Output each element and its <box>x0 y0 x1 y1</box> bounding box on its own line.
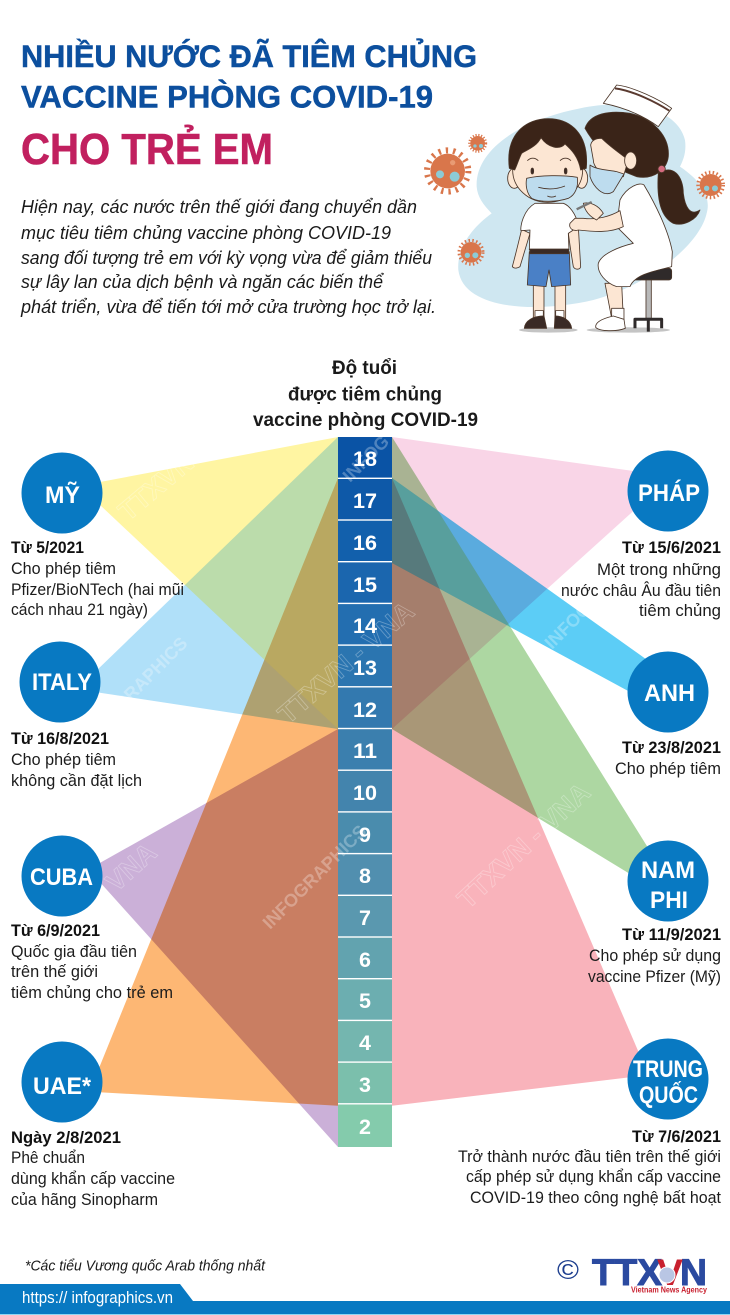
badge: Mỹ: MỸ <box>45 481 80 509</box>
badge: Nam Phi: NAM <box>641 857 695 884</box>
badge: Italy <box>20 642 100 722</box>
watermarks: INFOGRAPHICS <box>259 821 370 933</box>
caption: Italy: không cần đặt lịch <box>11 772 142 790</box>
nurse <box>570 85 700 332</box>
heading: age axis: được tiêm chủng <box>288 384 442 406</box>
cell: age 9 <box>338 813 392 853</box>
caption: Nam Phi: Cho phép sử dụng <box>589 947 721 965</box>
logo: TTXVN: V <box>657 1252 683 1293</box>
caption: Italy: Từ 16/8/2021 <box>11 730 109 748</box>
badge: Pháp <box>628 450 708 532</box>
caption: Anh: Cho phép tiêm <box>615 760 721 778</box>
cell: age 18 <box>338 437 392 478</box>
wedge: Trung Quốc ages 3 to 17 <box>392 478 642 1106</box>
cell: age 11 <box>338 729 392 770</box>
icon: virus large <box>427 150 468 192</box>
caption: Nam Phi <box>588 926 721 986</box>
caption: Pháp: Một trong những <box>597 561 721 579</box>
age scale bar <box>338 437 392 1147</box>
caption: UAE <box>11 1129 175 1209</box>
watermarks: INFOGRAPHICS <box>541 541 652 653</box>
caption: Italy: Cho phép tiêm <box>11 751 116 769</box>
logo: TTXVN: Vietnam News Agency <box>631 1284 707 1294</box>
badge: Anh: ANH <box>644 680 695 707</box>
wedge: Nam Phi ages 12 to 18 <box>392 437 650 874</box>
caption: Nam Phi: Từ 11/9/2021 <box>622 926 721 944</box>
cell: age 10: 10 <box>353 781 377 805</box>
title: VACCINE PHÒNG COVID-19 <box>21 78 433 114</box>
cell: age 13: 13 <box>353 656 377 680</box>
cell: age 9: 9 <box>359 823 371 847</box>
wedge: Cuba ages 2 to 12 <box>98 729 338 1147</box>
caption: Pháp <box>561 539 721 620</box>
watermarks: INFOGRAPHICS <box>80 633 191 745</box>
watermarks: VNA <box>100 837 162 897</box>
logo: TTXVN <box>557 1252 707 1294</box>
caption: Cuba: Quốc gia đầu tiên <box>11 943 137 961</box>
country: UAE <box>11 1042 175 1209</box>
footer bar <box>0 1284 730 1315</box>
watermarks: TTXVN <box>113 447 200 527</box>
icon: virus small top <box>469 135 486 152</box>
boy <box>508 119 588 328</box>
cell: age 5: 5 <box>359 989 371 1013</box>
cell: age 4 <box>338 1021 392 1061</box>
badge: Pháp: PHÁP <box>638 479 700 507</box>
wedge: Anh ages 15 to 17 <box>392 478 650 692</box>
cell: age 7: 7 <box>359 906 371 930</box>
caption: Cuba: tiêm chủng cho trẻ em <box>11 984 173 1002</box>
cell: age 14: 14 <box>353 614 377 638</box>
intro text: phát triển, vừa để tiến tới mở cửa trường học trở lại. <box>20 296 436 317</box>
cell: age 16: 16 <box>353 531 377 555</box>
watermarks: TTXVN - VNA <box>452 777 596 914</box>
cell: age 11: 11 <box>353 739 377 763</box>
badge: Italy: ITALY <box>32 669 92 696</box>
caption: Nam Phi: vaccine Pfizer (Mỹ) <box>588 968 721 986</box>
caption: Trung Quốc: Từ 7/6/2021 <box>632 1128 721 1146</box>
badge: Nam Phi: PHI <box>650 887 688 914</box>
cell: age 14 <box>338 604 392 644</box>
footnote: *Các tiểu Vương quốc Arab thống nhất <box>25 1258 266 1274</box>
watermarks: INFOG <box>339 431 393 486</box>
caption: Pháp: nước châu Âu đầu tiên <box>561 581 721 600</box>
logo: TTXVN: © <box>557 1255 579 1285</box>
cell: age 16 <box>338 521 392 561</box>
wedge: UAE ages 3 to 17 <box>95 478 338 1106</box>
caption: Cuba: trên thế giới <box>11 963 98 981</box>
caption: Cuba <box>11 922 173 1002</box>
country: Trung Quốc <box>458 1038 721 1207</box>
caption: Mỹ: cách nhau 21 ngày) <box>11 601 148 619</box>
title <box>21 38 477 174</box>
cell: age 6: 6 <box>359 948 371 972</box>
caption: Mỹ <box>11 539 184 619</box>
country: Mỹ <box>11 452 184 619</box>
icon: virus right <box>698 172 723 198</box>
badge: Nam Phi <box>628 840 708 922</box>
caption: UAE: Ngày 2/8/2021 <box>11 1129 121 1147</box>
wedge: Pháp ages 12 to 18 <box>392 437 640 729</box>
caption: Anh: Từ 23/8/2021 <box>622 739 721 757</box>
title: CHO TRẺ EM <box>21 124 273 174</box>
footer bar: https:// infographics.vn <box>22 1288 173 1307</box>
illustration: nurse vaccinating a child <box>427 85 723 333</box>
cell: age 15 <box>338 562 392 603</box>
overlap lightening: left <box>186 438 338 729</box>
badge: Trung Quốc <box>628 1038 708 1120</box>
cell: age 6 <box>338 938 392 978</box>
cell: age 12 <box>338 688 392 728</box>
intro text: mục tiêu tiêm chủng vaccine phòng COVID-19 <box>21 222 391 243</box>
cell: age 8 <box>338 854 392 895</box>
cell: age 4: 4 <box>359 1031 371 1055</box>
cell: age 2 <box>338 1104 392 1147</box>
caption: Italy <box>11 730 142 790</box>
badge: Mỹ <box>22 452 102 534</box>
badge: UAE: UAE* <box>33 1073 92 1100</box>
country: Anh <box>615 652 721 778</box>
cell: age 15: 15 <box>353 573 377 597</box>
caption: Cuba: Từ 6/9/2021 <box>11 922 100 940</box>
cell: age 5 <box>338 979 392 1020</box>
badge: Cuba <box>22 836 102 916</box>
caption: UAE: dùng khẩn cấp vaccine <box>11 1170 175 1188</box>
caption: Pháp: Từ 15/6/2021 <box>622 539 721 557</box>
watermarks: TTXVN - VNA <box>272 596 420 730</box>
logo: TTXVN: TTX <box>592 1252 662 1293</box>
cell: age 2: 2 <box>359 1115 371 1139</box>
caption: Trung Quốc: Trở thành nước đầu tiên trên thế giới <box>458 1148 721 1166</box>
cell: age 7 <box>338 896 392 936</box>
icon: virus lower left <box>459 240 483 264</box>
badge: Trung Quốc: TRUNG <box>633 1056 703 1083</box>
intro text: sang đối tượng trẻ em với kỳ vọng vừa để giảm thiểu <box>21 247 432 268</box>
cell: age 8: 8 <box>359 864 371 888</box>
caption: Trung Quốc: COVID-19 theo công nghệ bất hoạt <box>470 1189 721 1207</box>
caption: Anh <box>615 739 721 778</box>
cell: age 10 <box>338 771 392 811</box>
intro text: sự lây lan của dịch bệnh và ngăn các biến thể <box>21 271 385 292</box>
wedge: Mỹ ages 12 to 18 <box>100 437 338 729</box>
heading: age axis <box>253 357 478 431</box>
badge: UAE <box>22 1042 102 1122</box>
intro text: Hiện nay, các nước trên thế giới đang chuyển dần <box>21 196 417 217</box>
intro text <box>20 196 436 317</box>
title: NHIỀU NƯỚC ĐÃ TIÊM CHỦNG <box>21 38 477 74</box>
heading: age axis: Độ tuổi <box>332 357 397 379</box>
heading: age axis: vaccine phòng COVID-19 <box>253 409 478 431</box>
country: Cuba <box>11 836 173 1002</box>
cell: age 3: 3 <box>359 1073 371 1097</box>
caption: Mỹ: Pfizer/BioNTech (hai mũi <box>11 581 184 599</box>
cell: age 3 <box>338 1063 392 1103</box>
caption: UAE: Phê chuẩn <box>11 1149 85 1167</box>
overlap lightening: right <box>392 478 510 627</box>
caption: Trung Quốc <box>458 1128 721 1207</box>
caption: Mỹ: Từ 5/2021 <box>11 539 84 557</box>
watermarks <box>80 431 652 933</box>
cell: age 17: 17 <box>353 489 377 513</box>
logo: TTXVN: N <box>680 1252 707 1293</box>
caption: Pháp: tiêm chủng <box>639 602 721 620</box>
caption: Trung Quốc: cấp phép sử dụng khẩn cấp vaccine <box>466 1168 721 1186</box>
caption: UAE: của hãng Sinopharm <box>11 1191 158 1209</box>
caption: Mỹ: Cho phép tiêm <box>11 560 116 578</box>
badge: Cuba: CUBA <box>30 864 93 891</box>
cell: age 18: 18 <box>353 447 377 471</box>
country: Italy <box>11 642 142 790</box>
country: Nam Phi <box>588 840 721 986</box>
cell: age 13 <box>338 646 392 686</box>
wedge: Italy ages 12 to 18 <box>95 437 338 729</box>
cell: age 12: 12 <box>353 698 377 722</box>
cell: age 17 <box>338 479 392 519</box>
country: Pháp <box>561 450 721 620</box>
badge: Trung Quốc: QUỐC <box>639 1081 698 1109</box>
